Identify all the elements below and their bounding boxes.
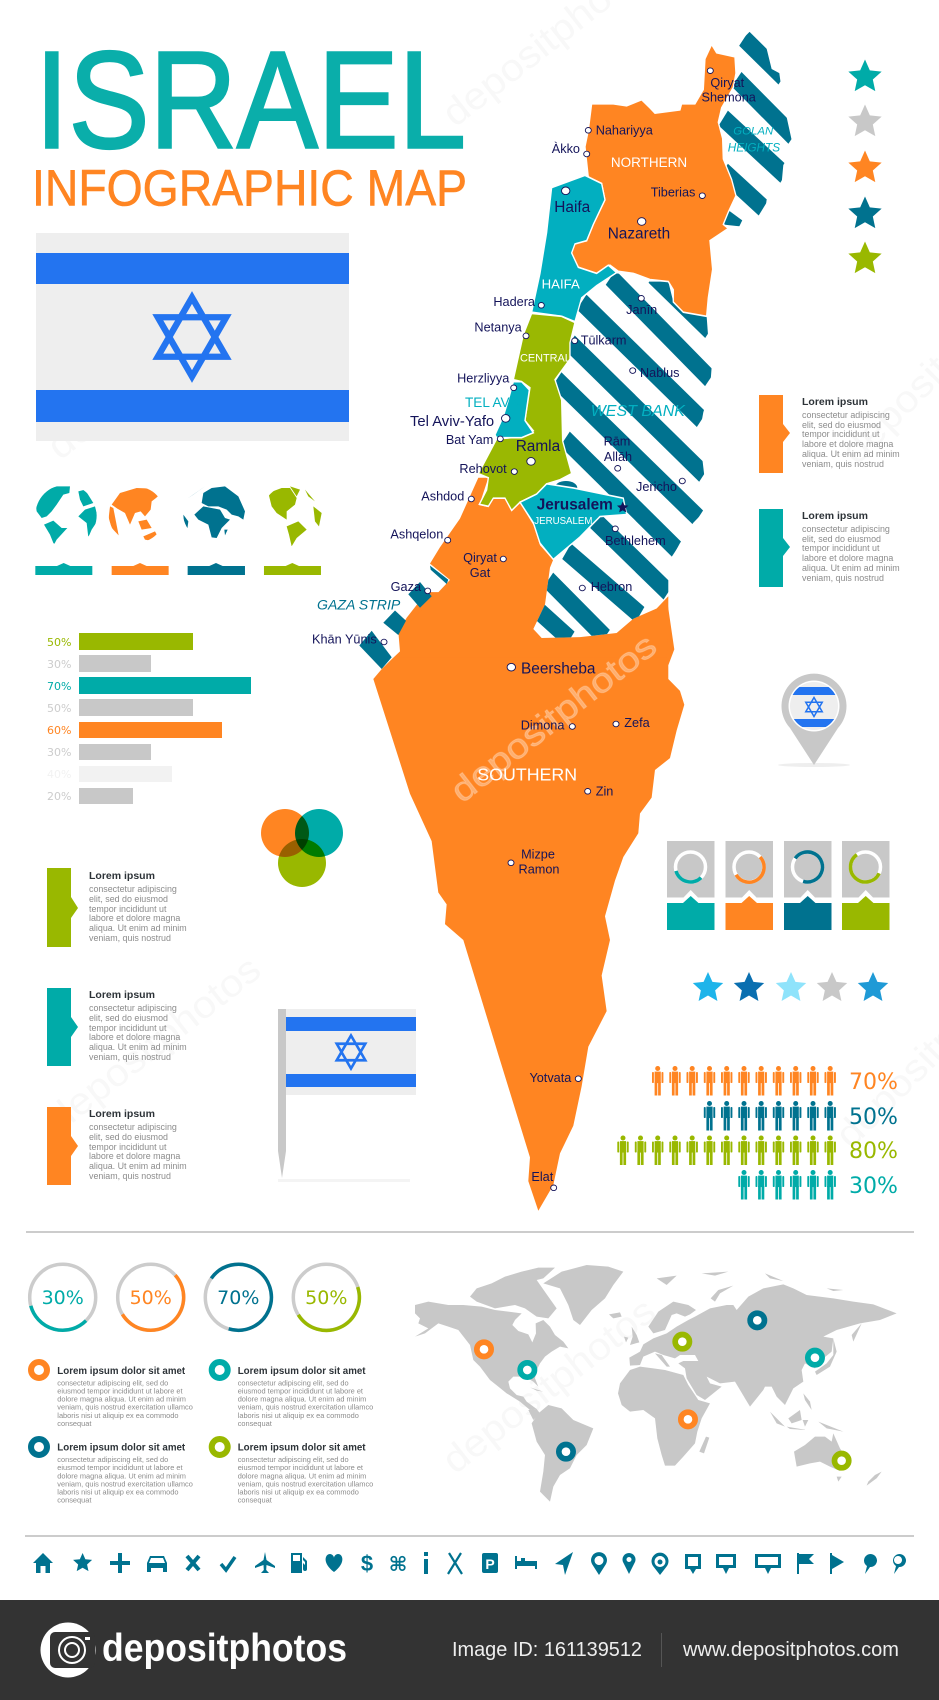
card: dark <box>784 841 832 930</box>
text block: dark bullet: eiusmod tempor incididunt ut labore et <box>57 1463 183 1472</box>
callout: teal: consectetur adipiscing <box>89 1003 177 1013</box>
callout: right orange: elit, sed do eiusmod <box>802 420 881 430</box>
map upper regions <box>400 38 793 658</box>
callout: right teal: consectetur adipiscing <box>802 524 890 534</box>
map labels: Herzliyya <box>457 372 510 386</box>
region: Northern <box>570 45 736 316</box>
map labels: NORTHERN <box>611 155 687 170</box>
text block: dark bullet: dolore magna aliqua. Ut enim ad minim <box>57 1471 186 1480</box>
text block: dark bullet: veniam, quis nostrud exercitation ullamco <box>57 1479 193 1488</box>
text block: dark bullet: Lorem ipsum dolor sit amet <box>57 1442 186 1454</box>
map labels: Qiryat <box>710 76 745 90</box>
panel: percentage rings <box>30 1264 359 1330</box>
callout: teal: aliqua. Ut enim ad minim <box>89 1042 187 1052</box>
pictogram: green 80%: 80% <box>849 1139 898 1164</box>
map labels: Hadera <box>493 295 536 309</box>
map labels: Ramon <box>519 862 559 876</box>
text block: green bullet: Lorem ipsum dolor sit amet <box>238 1442 366 1454</box>
text block: orange bullet: consequat <box>57 1419 91 1428</box>
globe base bars <box>35 563 321 575</box>
map labels: Mizpe <box>521 848 555 862</box>
icon: car <box>147 1556 167 1572</box>
map labels: Àkko <box>552 141 580 156</box>
map labels: Netanya <box>474 320 523 334</box>
map labels: Tiberias <box>651 186 695 200</box>
icon: flag <box>797 1553 814 1574</box>
background watermarks: depositphotos <box>40 276 269 468</box>
callout: right teal <box>759 509 900 587</box>
pictogram: dark 50% <box>704 1101 898 1130</box>
map labels: GOLAN <box>733 126 774 138</box>
region: Haifa <box>532 175 617 322</box>
pictogram: green 80% <box>617 1136 898 1165</box>
ring: 30%: 30% <box>42 1287 84 1309</box>
subtitle: INFOGRAPHIC MAP <box>32 160 467 216</box>
callout: teal: elit, sed do eiusmod <box>89 1013 168 1023</box>
region: Gaza Strip <box>359 566 448 669</box>
venn circles <box>261 809 343 887</box>
map labels: Janīn <box>626 303 657 317</box>
city markers <box>381 68 713 1191</box>
bar chart: 20% <box>47 790 71 803</box>
title: ISRAEL <box>35 24 466 178</box>
icon: command: ⌘ <box>389 1552 407 1576</box>
logo: wordmark: depositphotos <box>102 1627 347 1670</box>
background watermarks: depositphotos <box>435 1290 664 1482</box>
text block: green bullet: laboris nisi ut aliquip ex ea commodo <box>238 1488 359 1497</box>
panel: ring cards <box>667 841 890 930</box>
callout: green: tempor incididunt ut <box>89 904 167 914</box>
map labels: Bat Yam <box>446 433 493 447</box>
panel: globes <box>35 486 322 575</box>
text block: teal bullet: Lorem ipsum dolor sit amet <box>238 1366 366 1377</box>
icon: green globe <box>268 486 322 546</box>
region: Jerusalem <box>520 484 627 559</box>
icon: callout <box>716 1554 736 1574</box>
icon: tag pin <box>685 1554 701 1574</box>
icon: home <box>33 1553 53 1573</box>
icon: parking: P <box>485 1556 495 1572</box>
text block: teal bullet: consequat <box>238 1419 272 1428</box>
map of Israel <box>312 38 793 1211</box>
map labels: WEST BANK <box>591 403 686 420</box>
callout: teal: Lorem ipsum <box>89 989 155 1001</box>
map labels <box>312 76 780 1184</box>
continents: Eurasia Africa Oceania <box>618 1272 897 1486</box>
region: Golan Heights <box>722 38 793 228</box>
map labels: Rehovot <box>459 462 507 476</box>
callout: orange: veniam, quis nostrud <box>89 1171 171 1181</box>
callout: green <box>47 868 187 947</box>
text block: dark bullet <box>31 1439 193 1505</box>
map labels: Bethlehem <box>605 534 666 548</box>
callout: right orange <box>759 395 900 473</box>
icon row <box>33 1551 906 1576</box>
text block: orange bullet: consectetur adipiscing elit, sed do <box>57 1378 168 1387</box>
map labels: SOUTHERN <box>477 764 577 784</box>
text block: teal bullet <box>212 1362 373 1428</box>
text block: green bullet: dolore magna aliqua. Ut enim ad minim <box>238 1471 366 1480</box>
icon: wide callout <box>755 1554 781 1574</box>
callout: orange: elit, sed do eiusmod <box>89 1132 168 1142</box>
map labels: Dimona <box>521 718 565 732</box>
region: Southern lower <box>373 592 684 1211</box>
callout: teal: labore et dolore magna <box>89 1032 180 1042</box>
callout: green: consectetur adipiscing <box>89 884 177 894</box>
flag on pole <box>278 1009 416 1182</box>
text block: teal bullet: eiusmod tempor incididunt ut labore et <box>238 1386 363 1395</box>
map labels: HAIFA <box>542 276 580 292</box>
pictogram: dark 50%: 50% <box>849 1105 898 1130</box>
icon: teal globe <box>35 486 98 545</box>
callout: orange: aliqua. Ut enim ad minim <box>89 1161 187 1171</box>
map labels: Gat <box>470 566 491 580</box>
text block: teal bullet: veniam, quis nostrud exercitation ullamco <box>238 1403 373 1412</box>
callout: orange <box>47 1107 187 1185</box>
map watermark: depositphotos <box>444 626 664 810</box>
panel: large flag <box>36 233 349 441</box>
icon: plus <box>110 1553 130 1573</box>
bar chart: 30% <box>47 658 71 671</box>
ring: 50% orange <box>118 1264 184 1330</box>
map labels: Shemona <box>702 90 757 104</box>
callout: right teal: veniam, quis nostrud <box>802 573 884 583</box>
map labels: TEL AVIV <box>465 395 522 410</box>
map labels: Nazareth <box>608 226 670 242</box>
map labels: Gaza <box>391 580 422 594</box>
text block: teal bullet: laboris nisi ut aliquip ex ea commodo <box>238 1411 359 1420</box>
callout: teal <box>47 988 187 1066</box>
card: teal <box>667 841 714 930</box>
map labels: Haifa <box>554 199 591 216</box>
text block: green bullet <box>212 1439 373 1505</box>
icon: pennant <box>830 1553 844 1574</box>
text block: teal bullet: consectetur adipiscing elit, sed do <box>238 1378 349 1387</box>
callout: green: elit, sed do eiusmod <box>89 894 168 904</box>
region: West Bank <box>533 274 712 638</box>
callout: right teal: Lorem ipsum <box>802 510 868 522</box>
text block: orange bullet: veniam, quis nostrud exercitation ullamco <box>57 1403 193 1412</box>
icon: cutlery <box>448 1553 462 1574</box>
text block: dark bullet: consequat <box>57 1496 91 1505</box>
map labels: Zin <box>596 784 613 798</box>
map labels: Yotvata <box>529 1071 572 1085</box>
bar chart: 70% <box>47 680 71 693</box>
text block: green bullet: veniam, quis nostrud exercitation ullamco <box>238 1479 373 1488</box>
callout: right teal: aliqua. Ut enim ad minim <box>802 563 900 573</box>
text block: green bullet: consectetur adipiscing elit, sed do <box>238 1455 349 1464</box>
ring: 50% orange: 50% <box>130 1287 172 1309</box>
region: Southern upper <box>400 478 668 658</box>
text block: orange bullet: laboris nisi ut aliquip ex ea commodo <box>57 1411 179 1420</box>
icon: target pin <box>652 1553 668 1575</box>
map labels: Nahariyya <box>596 124 654 138</box>
text block: teal bullet: dolore magna aliqua. Ut enim ad minim <box>238 1395 366 1404</box>
pictogram: teal 30% <box>738 1170 898 1200</box>
icon: capital star <box>617 502 628 512</box>
bar chart <box>47 633 251 804</box>
pictogram: orange 70%: 70% <box>849 1070 898 1095</box>
footer bar <box>0 1600 939 1700</box>
map labels: Nablus <box>640 366 680 380</box>
map labels: Elat <box>531 1170 554 1184</box>
image id: Image ID: 161139512 <box>452 1638 642 1661</box>
text block: green bullet: consequat <box>238 1496 272 1505</box>
callout: orange: consectetur adipiscing <box>89 1122 177 1132</box>
icon: parking <box>482 1553 498 1573</box>
icon: check <box>221 1557 235 1570</box>
callout: green: labore et dolore magna <box>89 913 180 923</box>
ring: 70% <box>205 1264 271 1330</box>
icon: dark globe <box>183 486 245 538</box>
icon: bed <box>515 1556 537 1569</box>
callout: right orange: aliqua. Ut enim ad minim <box>802 449 900 459</box>
map labels: Ramla <box>516 438 561 455</box>
map labels: Zefa <box>624 716 651 730</box>
callout: green: veniam, quis nostrud <box>89 933 171 943</box>
text block: green bullet: eiusmod tempor incididunt ut labore et <box>238 1463 363 1472</box>
icon: star <box>73 1553 92 1571</box>
map labels: Tūlkarm <box>581 334 627 348</box>
callout: right teal: labore et dolore magna <box>802 553 893 563</box>
pictogram: orange 70% <box>652 1066 898 1096</box>
map labels: Hebron <box>591 580 632 594</box>
text block: dark bullet: laboris nisi ut aliquip ex ea commodo <box>57 1488 179 1497</box>
text block: orange bullet: Lorem ipsum dolor sit amet <box>57 1366 186 1377</box>
pictogram: teal 30%: 30% <box>849 1174 898 1199</box>
website: www.depositphotos.com <box>682 1638 899 1661</box>
map labels: Beersheba <box>521 660 596 678</box>
ring: 70%: 70% <box>217 1287 259 1309</box>
text block: orange bullet: dolore magna aliqua. Ut enim ad minim <box>57 1395 186 1404</box>
callout: right orange: veniam, quis nostrud <box>802 459 884 469</box>
icon: cross <box>187 1556 199 1570</box>
bar chart: 30% <box>47 746 71 759</box>
ring: 30% <box>30 1264 96 1330</box>
map labels: Qiryat <box>463 551 497 565</box>
icon: heart <box>326 1554 342 1572</box>
icon: dollar: $ <box>361 1551 373 1576</box>
icon: plane <box>255 1552 275 1573</box>
ring: 50% green <box>293 1264 359 1330</box>
callout: orange: labore et dolore magna <box>89 1151 180 1161</box>
card: orange <box>726 841 773 930</box>
callout: green: aliqua. Ut enim ad minim <box>89 923 187 933</box>
star rating row <box>693 972 888 1001</box>
bar chart: 50% <box>47 636 71 649</box>
map labels: HEIGHTS <box>728 140 780 154</box>
callout: orange: tempor incididunt ut <box>89 1142 167 1152</box>
callout: orange: Lorem ipsum <box>89 1108 155 1120</box>
callout: right orange: consectetur adipiscing <box>802 410 890 420</box>
map labels: Jericho <box>636 480 677 494</box>
icon: map pin solid <box>864 1554 877 1574</box>
map labels: GAZA STRIP <box>317 596 401 612</box>
location markers <box>477 1313 849 1468</box>
map labels: Ashqelon <box>390 528 443 542</box>
map labels: Khān Yūnis <box>312 632 377 646</box>
callout: right teal: tempor incididunt ut <box>802 543 880 553</box>
text block: orange bullet <box>31 1362 193 1428</box>
icon: navigation <box>555 1552 573 1575</box>
callout: green: Lorem ipsum <box>89 870 155 882</box>
icon: info <box>424 1552 428 1574</box>
map labels: Allāh <box>604 450 632 464</box>
background watermarks: depositphotos <box>40 948 269 1140</box>
region: Central <box>478 313 575 510</box>
star column <box>848 60 882 273</box>
callout: right orange: tempor incididunt ut <box>802 429 880 439</box>
bar chart: 60% <box>47 724 71 737</box>
icon: small pin <box>622 1553 636 1574</box>
text block: dark bullet: consectetur adipiscing elit, sed do <box>57 1455 168 1464</box>
world map <box>415 1265 897 1502</box>
icon: map pin outline <box>893 1554 906 1574</box>
region: Tel Aviv <box>495 382 533 438</box>
callout: teal: tempor incididunt ut <box>89 1023 167 1033</box>
callout: right orange: labore et dolore magna <box>802 439 893 449</box>
callout: teal: veniam, quis nostrud <box>89 1052 171 1062</box>
icon: orange globe <box>109 488 163 541</box>
map labels: Tel Aviv-Yafo <box>410 414 494 430</box>
icon: ring pin <box>591 1552 607 1575</box>
map labels: JERUSALEM <box>534 516 592 527</box>
callout: right teal: elit, sed do eiusmod <box>802 534 881 544</box>
logo: camera <box>40 1622 96 1678</box>
bar chart: 40% <box>47 768 71 781</box>
ring: 50% green: 50% <box>305 1287 347 1309</box>
text block: orange bullet: eiusmod tempor incididunt ut labore et <box>57 1386 183 1395</box>
map labels: Jerusalem <box>537 496 613 514</box>
icon: fuel <box>291 1553 307 1573</box>
map labels: Rām <box>604 434 630 448</box>
map labels: Ashdod <box>421 490 464 504</box>
callout: right orange: Lorem ipsum <box>802 396 868 408</box>
continents: Americas <box>415 1265 623 1502</box>
icon: flag map pin <box>778 674 850 767</box>
card: green <box>842 841 890 930</box>
map labels: CENTRAL <box>520 352 571 364</box>
bar chart: 50% <box>47 702 71 715</box>
